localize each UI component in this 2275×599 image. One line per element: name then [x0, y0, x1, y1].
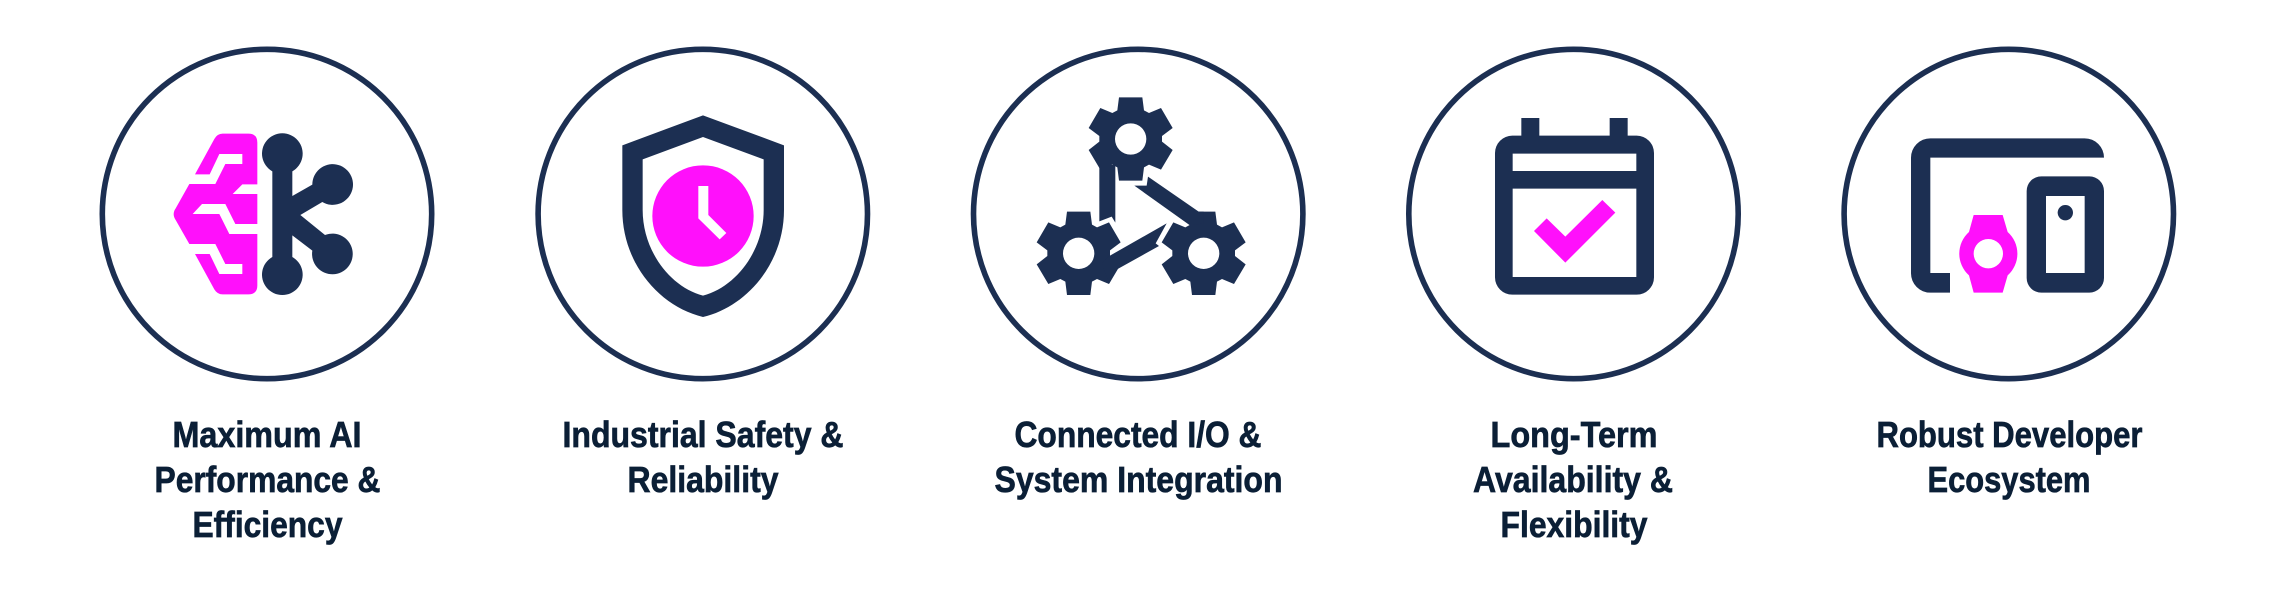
icon part: watch	[1959, 215, 2017, 293]
heading 3	[994, 414, 1282, 500]
heading 1: Maximum AI	[172, 414, 362, 455]
heading 4: Availability &	[1473, 459, 1673, 500]
circle outline 4	[1409, 49, 1738, 379]
heading 3: System Integration	[994, 459, 1282, 500]
icon part: clock hands	[698, 186, 726, 239]
icon part: magenta brain	[174, 134, 257, 294]
heading 3: Connected I/O &	[1014, 414, 1262, 455]
panel: Long-Term Availability & Flexibility	[1409, 49, 1738, 545]
icon part: left gear	[1037, 212, 1121, 295]
heading 1: Performance &	[154, 459, 380, 500]
heading 5: Ecosystem	[1928, 459, 2090, 500]
panel: Robust Developer Ecosystem	[1844, 49, 2174, 500]
icon: shield with clock	[622, 115, 784, 317]
icon part: phone dot	[2058, 205, 2073, 220]
heading 4: Long-Term	[1490, 414, 1658, 455]
heading 5	[1876, 414, 2142, 500]
icon part: tablet outline	[1911, 138, 2104, 293]
icon: tablet, phone and watch	[1911, 138, 2104, 293]
icon part: clock face	[652, 165, 754, 267]
circle outline 3	[973, 49, 1303, 379]
icon part: top gear	[1089, 97, 1173, 181]
icon part: calendar body	[1495, 118, 1654, 295]
icon part: right gear	[1162, 212, 1246, 295]
icon part: check mark	[1534, 200, 1615, 263]
icon part: shield	[622, 115, 784, 317]
icon part: phone	[2027, 176, 2104, 293]
circle outline 1	[102, 49, 432, 379]
heading 2: Reliability	[628, 459, 779, 500]
heading 1: Efficiency	[192, 504, 343, 545]
icon: calendar with check	[1495, 118, 1654, 295]
panel: Connected I/O & System Integration	[973, 49, 1303, 500]
icon part: navy network nodes	[262, 133, 353, 295]
heading 4: Flexibility	[1500, 504, 1648, 545]
panel: Maximum AI Performance & Efficiency	[102, 49, 432, 545]
icon: three connected gears	[1037, 97, 1246, 295]
heading 2	[562, 414, 844, 500]
panel: Industrial Safety & Reliability	[538, 49, 868, 500]
heading 2: Industrial Safety &	[562, 414, 844, 455]
heading 1	[154, 414, 380, 545]
circle outline 5	[1844, 49, 2174, 379]
icon part: connecting arms	[1099, 165, 1204, 283]
heading 4	[1473, 414, 1673, 545]
icon: brain and network	[174, 133, 353, 295]
heading 5: Robust Developer	[1876, 414, 2142, 455]
circle outline 2	[538, 49, 868, 379]
